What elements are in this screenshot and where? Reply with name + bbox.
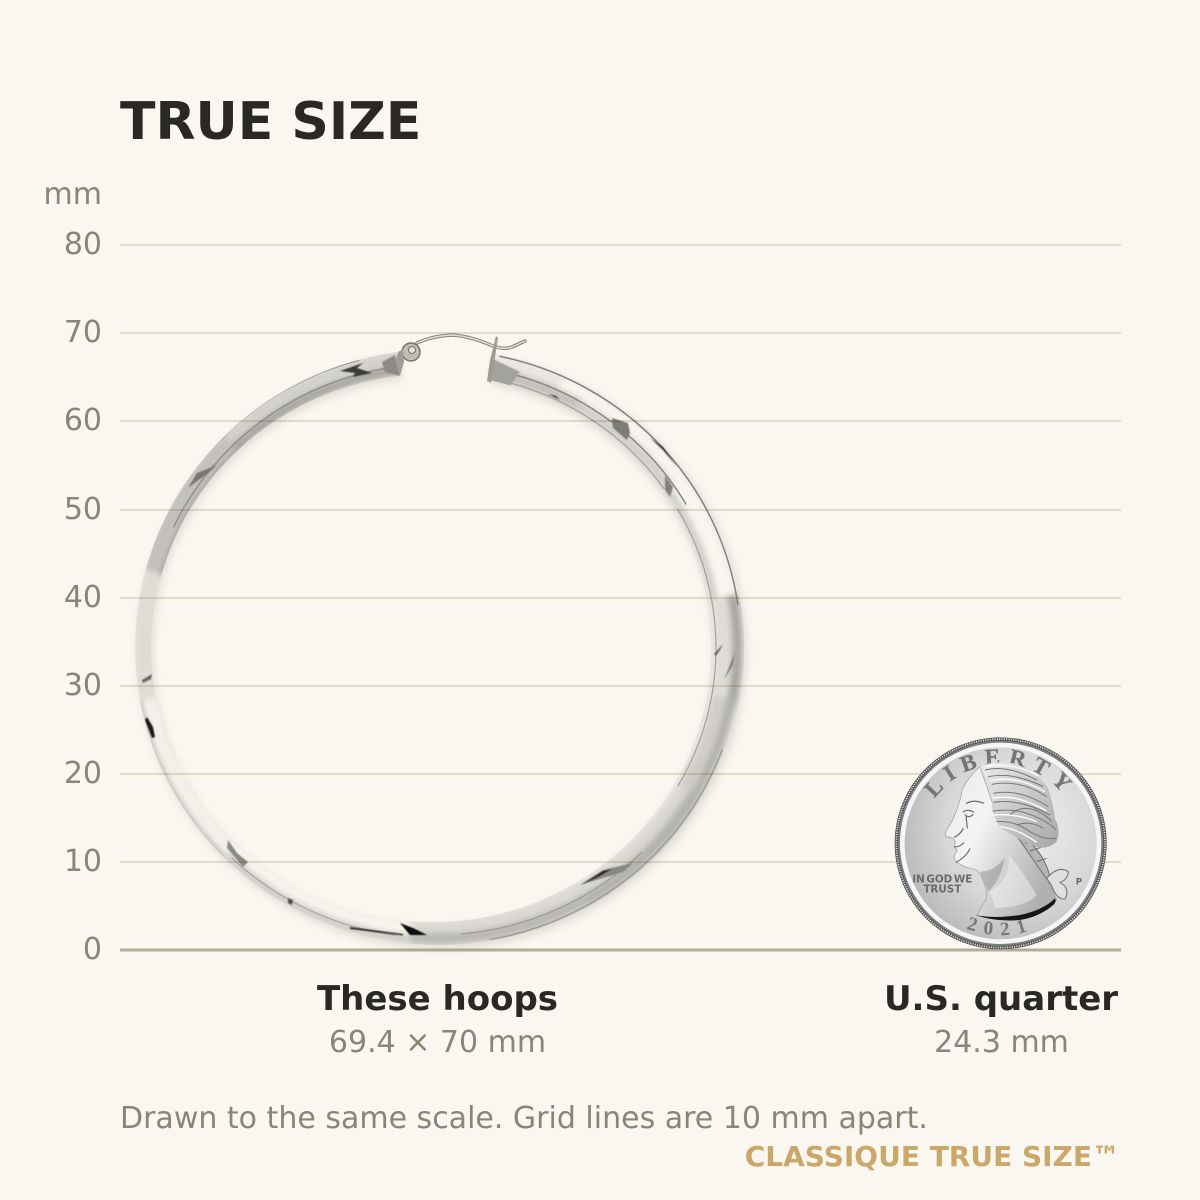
label: these hoops [317,979,558,1060]
coin lettering: motto: TRUST [923,884,961,896]
label: U.S. quarter [884,979,1118,1060]
axis labels in millimetres: 10 [64,844,102,879]
axis labels in millimetres: 30 [64,668,102,703]
axis labels in millimetres: 50 [64,492,102,527]
brand mark: CLASSIQUE TRUE SIZE™ [745,1140,1120,1173]
quarter coin [894,737,1107,950]
bust: neck and face [945,767,1057,919]
axis labels in millimetres: 40 [64,580,102,615]
bust: facial features [954,801,984,862]
axis labels in millimetres: 80 [64,227,102,262]
bust: neck shading [990,855,1037,908]
hoop dark reflections [142,355,735,936]
hoop earring [120,335,760,960]
label: U.S. quarter: U.S. quarter [884,979,1118,1019]
coin lettering: Liberty: LIBERTY [923,749,1073,798]
bust: under-shadow crescent [976,898,1056,921]
coin lettering: motto: P [1076,877,1082,887]
label: these hoops: 69.4 × 70 mm [329,1025,546,1060]
coin body [895,737,1107,949]
axis labels in millimetres: 20 [64,756,102,791]
chart: size scale grid and axis [120,245,1121,950]
axis labels in millimetres: 60 [64,403,102,438]
label: U.S. quarter: 24.3 mm [934,1025,1069,1060]
coin lettering: year: 2021 [966,917,1027,936]
coin lettering: motto [912,874,1082,896]
axis labels in millimetres: 70 [64,315,102,350]
bust: hair [980,762,1059,848]
hoop band [120,340,760,960]
axis labels in millimetres: mm [44,177,102,212]
hoop shaded facets [134,351,740,943]
coin lettering: motto: IN GOD WE [912,874,972,886]
axis labels in millimetres: 0 [83,932,102,967]
footnote: Drawn to the same scale. Grid lines are 10 mm apart. [120,1101,928,1136]
title: TRUE SIZE [120,92,421,152]
hoop clasp [396,335,525,383]
bust: queue and bow [1017,837,1068,899]
axis labels in millimetres [44,177,102,967]
label: these hoops: These hoops [317,979,558,1019]
hoop edge lines [134,350,741,944]
bust: hair waves [985,768,1056,839]
hoop shadow [137,356,746,949]
